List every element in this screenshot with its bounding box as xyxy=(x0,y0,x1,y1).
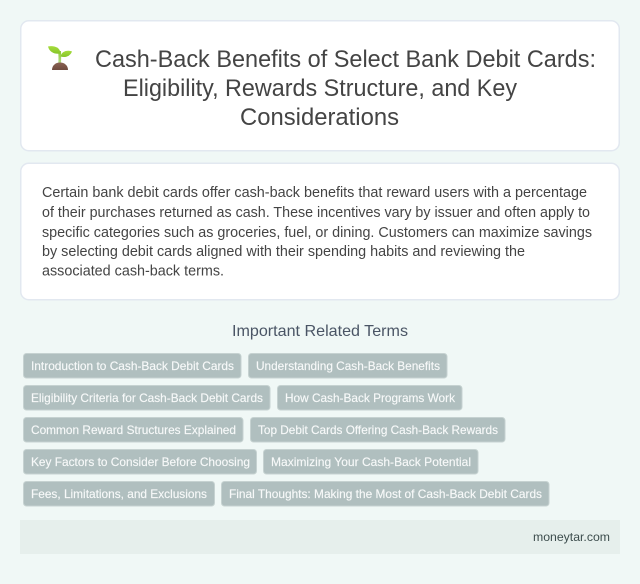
panel: related term tags xyxy=(24,354,549,506)
tag xyxy=(24,482,214,506)
tag xyxy=(248,354,447,378)
heading: related terms: Important Related Terms xyxy=(232,323,408,340)
tag: Top Debit Cards Offering Cash-Back Rewards xyxy=(258,423,498,437)
tag xyxy=(24,386,270,410)
description text: by selecting debit cards aligned with their spending habits and reviewing the xyxy=(42,244,525,260)
description text xyxy=(42,185,592,280)
panel: title card xyxy=(21,21,619,151)
tag xyxy=(264,450,478,474)
tag xyxy=(24,450,256,474)
tag: Maximizing Your Cash-Back Potential xyxy=(271,455,471,469)
title: Considerations xyxy=(240,104,399,131)
title: Eligibility, Rewards Structure, and Key xyxy=(123,75,517,102)
tag: Final Thoughts: Making the Most of Cash-Back Debit Cards xyxy=(229,487,542,501)
tag: Understanding Cash-Back Benefits xyxy=(256,359,440,373)
description text: of their purchases returned as cash. These incentives vary by issuer and often apply to xyxy=(42,205,590,221)
icon: sprout xyxy=(48,46,72,70)
tag xyxy=(278,386,462,410)
tag xyxy=(250,418,505,442)
title xyxy=(95,46,596,131)
description text: Certain bank debit cards offer cash-back benefits that reward users with a percentage xyxy=(42,185,587,201)
tag xyxy=(24,418,243,442)
tag: Key Factors to Consider Before Choosing xyxy=(31,455,250,469)
description text: associated cash-back terms. xyxy=(42,264,224,280)
description text: specific categories such as groceries, fuel, or dining. Customers can maximize savings xyxy=(42,225,592,241)
tag xyxy=(222,482,549,506)
tag: Fees, Limitations, and Exclusions xyxy=(31,487,207,501)
tag xyxy=(24,354,241,378)
tag: Common Reward Structures Explained xyxy=(31,423,236,437)
footer source text: moneytar.com xyxy=(533,530,610,544)
tag: How Cash-Back Programs Work xyxy=(285,391,456,405)
title: Cash-Back Benefits of Select Bank Debit Cards: xyxy=(95,46,596,73)
tag: Introduction to Cash-Back Debit Cards xyxy=(31,359,234,373)
tag: Eligibility Criteria for Cash-Back Debit Cards xyxy=(31,391,263,405)
panel: description card xyxy=(21,163,619,300)
footer xyxy=(20,520,620,554)
